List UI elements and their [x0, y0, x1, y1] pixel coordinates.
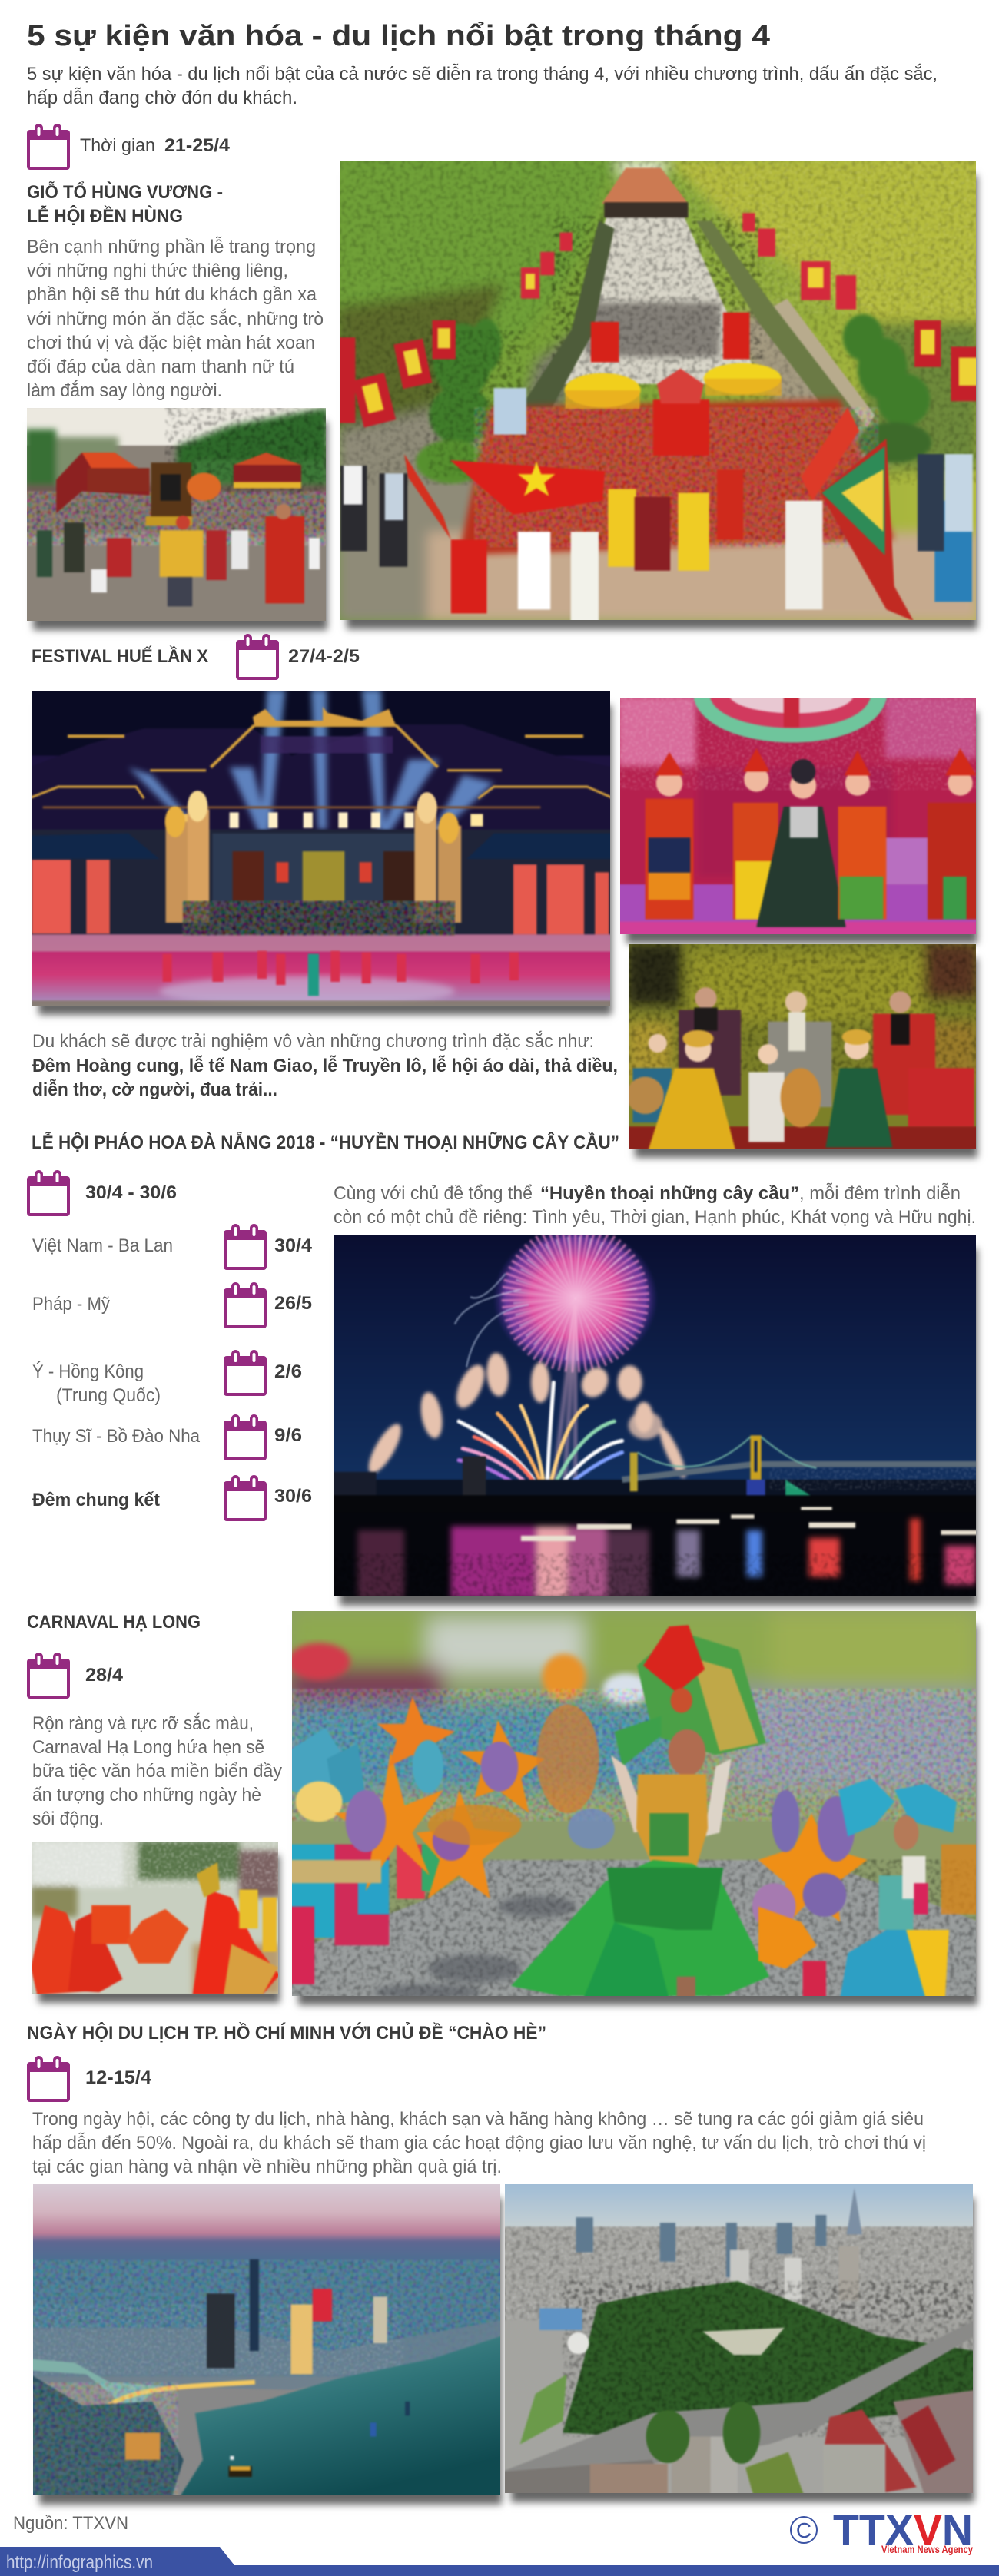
- paragraph: [27, 237, 324, 401]
- paragraph: Rộn ràng và rực rỡ sắc màu,: [32, 1713, 254, 1734]
- schedule row: Ý - Hồng Kông: (Trung Quốc): [56, 1385, 161, 1406]
- paragraph: Trong ngày hội, các công ty du lịch, nhà hàng, khách sạn và hãng hàng không … sẽ tung ra các gói giảm giá siêu: [32, 2109, 924, 2130]
- date: [80, 135, 231, 156]
- logo: TTXVN: TTXVN: [833, 2505, 973, 2554]
- photo: traditional musicians: [629, 944, 976, 1149]
- schedule row: Pháp - Mỹ: 26/5: [274, 1293, 312, 1314]
- paragraph: ấn tượng cho những ngày hè: [32, 1785, 261, 1805]
- date: 21-25/4: [164, 135, 231, 156]
- schedule row: Thụy Sĩ - Bồ Đào Nha: [32, 1414, 302, 1460]
- paragraph: Carnaval Hạ Long hứa hẹn sẽ: [32, 1737, 264, 1758]
- road crowd: [552, 217, 762, 384]
- heading: NGÀY HỘI DU LỊCH TP. HỒ CHÍ MINH VỚI CHỦ ĐỀ “CHÀO HÈ”: [27, 2021, 546, 2044]
- lower-left bank: [30, 2375, 184, 2497]
- photo: Saigon river at dusk: [33, 2184, 500, 2495]
- plumes: [363, 1352, 690, 1480]
- schedule row: Ý - Hồng Kông: Ý - Hồng Kông: [32, 1361, 144, 1382]
- heading: LỄ HỘI PHÁO HOA ĐÀ NẴNG 2018 - “HUYỀN THOẠI NHỮNG CÂY CẦU”: [32, 1131, 619, 1153]
- panel: Carnaval Hạ Long: [27, 1611, 984, 2011]
- panel: page header: [27, 20, 938, 108]
- intro text: 5 sự kiện văn hóa - du lịch nổi bật của cả nước sẽ diễn ra trong tháng 4, với nhiều chương trình, dấu ấn đặc sắc,: [27, 64, 938, 85]
- water reflections: [357, 1519, 976, 1599]
- right dancers: [752, 1779, 980, 1998]
- icon: calendar: [27, 124, 70, 170]
- burst: [493, 1227, 658, 1370]
- photo: fireworks over bridge: [334, 1235, 976, 1596]
- road: [288, 1860, 980, 1998]
- paragraph: bữa tiệc văn hóa miền biển đầy: [32, 1761, 282, 1782]
- towers: [207, 2293, 235, 2368]
- procession: [459, 399, 894, 555]
- beams: [128, 690, 494, 834]
- paragraph: tại các gian hàng và nhận về nhiều những phần quà giá trị.: [32, 2157, 502, 2177]
- description: còn có một chủ đề riêng: Tình yêu, Thời gian, Hạnh phúc, Khát vọng và Hữu nghị.: [334, 1207, 976, 1228]
- photo: aerial view of park: [505, 2184, 973, 2493]
- musicians: [626, 987, 974, 1150]
- paragraph: sôi động.: [32, 1809, 104, 1829]
- paragraph: Du khách sẽ được trải nghiệm vô vàn những chương trình đặc sắc như:: [32, 1031, 594, 1052]
- icon: calendar: [27, 2056, 70, 2102]
- photo: palanquin procession: [27, 408, 326, 621]
- left dancers: [288, 1696, 615, 1984]
- intro text: hấp dẫn đang chờ đón du khách.: [27, 88, 297, 108]
- schedule row: Thụy Sĩ - Bồ Đào Nha: Thụy Sĩ - Bồ Đào Nha: [32, 1426, 201, 1447]
- description: [334, 1183, 976, 1228]
- date: 27/4-2/5: [288, 646, 360, 667]
- icon: calendar: [27, 1170, 70, 1216]
- schedule row: Ý - Hồng Kông: [32, 1350, 302, 1406]
- schedule row: Thụy Sĩ - Bồ Đào Nha: 9/6: [274, 1425, 302, 1446]
- river: [180, 2336, 503, 2497]
- intro text: [27, 64, 938, 108]
- photo: red dress dancers: [32, 1842, 278, 1994]
- bridge: [84, 2382, 255, 2428]
- banners: [337, 213, 980, 427]
- photo: carnival dancer: [292, 1611, 976, 1996]
- footer: [0, 2505, 999, 2576]
- heading: [27, 181, 223, 227]
- dancers: [31, 1862, 280, 1994]
- stage: [28, 934, 614, 1007]
- logo: TTXVN: C: [796, 2518, 811, 2542]
- main dancer: [511, 1625, 769, 1998]
- roof outlines: [28, 725, 614, 798]
- heading: CARNAVAL HẠ LONG: [27, 1612, 201, 1633]
- logo: TTXVN: Vietnam News Agency: [881, 2543, 973, 2555]
- photo: Huế imperial palace night show: [32, 691, 610, 1006]
- photo: singers on stage: [620, 698, 976, 934]
- footer band: [0, 2547, 999, 2576]
- date: 30/4 - 30/6: [85, 1182, 177, 1203]
- paragraph: với những nghi thức thiêng liêng,: [27, 260, 288, 281]
- paragraph: [32, 1713, 282, 1829]
- paragraph: làm đắm say lòng người.: [27, 380, 222, 401]
- panel: Festival Huế: [32, 634, 984, 1163]
- schedule row: Việt Nam - Ba Lan: Việt Nam - Ba Lan: [32, 1235, 173, 1256]
- date: Thời gian: [80, 135, 155, 156]
- green flag: [821, 439, 914, 622]
- paragraph: phần hội sẽ thu hút du khách gần xa: [27, 284, 317, 305]
- paragraph: chơi thú vị và đặc biệt màn hát xoan: [27, 333, 315, 353]
- icon: calendar: [236, 634, 279, 680]
- date: 28/4: [85, 1665, 124, 1686]
- paragraph: với những món ăn đặc sắc, những trò: [27, 309, 324, 330]
- performers: [646, 748, 978, 927]
- panel: Ngày hội du lịch TP. Hồ Chí Minh: [27, 2021, 981, 2511]
- title: 5 sự kiện văn hóa - du lịch nổi bật trong tháng 4: [27, 20, 770, 52]
- description: “Huyền thoại những cây cầu”: [540, 1183, 799, 1204]
- icon: calendar: [27, 1653, 70, 1699]
- bridge: [330, 1435, 980, 1503]
- schedule row: Pháp - Mỹ: Pháp - Mỹ: [32, 1294, 110, 1315]
- paragraph: [32, 2109, 926, 2177]
- panel: Giỗ Tổ Hùng Vương: [27, 124, 984, 636]
- schedule row: Đêm chung kết: [32, 1475, 312, 1521]
- website url: http://infographics.vn: [6, 2552, 153, 2573]
- paragraph: [32, 1031, 618, 1100]
- schedule row: Việt Nam - Ba Lan: 30/4: [274, 1235, 313, 1256]
- street and buildings: [502, 2320, 976, 2495]
- panel: Lễ hội pháo hoa Đà Nẵng: [27, 1131, 984, 1611]
- source: Nguồn: TTXVN: [13, 2513, 128, 2534]
- heading: GIỖ TỔ HÙNG VƯƠNG -: [27, 181, 223, 203]
- description: , mỗi đêm trình diễn: [799, 1183, 961, 1204]
- heading: LỄ HỘI ĐỀN HÙNG: [27, 204, 183, 227]
- paragraph: Bên cạnh những phần lễ trang trọng: [27, 237, 316, 257]
- park: [563, 2281, 976, 2437]
- photo: procession at Hùng Temple: [340, 161, 976, 620]
- flag: [450, 460, 605, 515]
- paragraph: hấp dẫn đến 50%. Ngoài ra, du khách sẽ tham gia các hoạt động giao lưu văn nghệ, tư vấn du lịch, trò chơi thú vị: [32, 2133, 926, 2153]
- schedule row: Đêm chung kết: 30/6: [274, 1486, 312, 1507]
- paragraph: Đêm Hoàng cung, lễ tế Nam Giao, lễ Truyền lô, lễ hội áo dài, thả diều,: [32, 1055, 618, 1076]
- paragraph: diễn thơ, cờ người, đua trải...: [32, 1079, 277, 1100]
- fountain: [459, 1382, 622, 1503]
- schedule row: Việt Nam - Ba Lan: [32, 1224, 313, 1270]
- heading: FESTIVAL HUẾ LẦN X: [32, 645, 208, 667]
- schedule row: Pháp - Mỹ: [32, 1282, 312, 1328]
- people: [340, 388, 973, 623]
- schedule row: Đêm chung kết: Đêm chung kết: [32, 1490, 160, 1510]
- paragraph: đối đáp của dàn nam thanh nữ tú: [27, 356, 294, 377]
- lower building: [28, 830, 614, 938]
- schedule row: Ý - Hồng Kông: 2/6: [274, 1361, 302, 1382]
- date: 12-15/4: [85, 2067, 152, 2088]
- description: Cùng với chủ đề tổng thể: [334, 1183, 533, 1204]
